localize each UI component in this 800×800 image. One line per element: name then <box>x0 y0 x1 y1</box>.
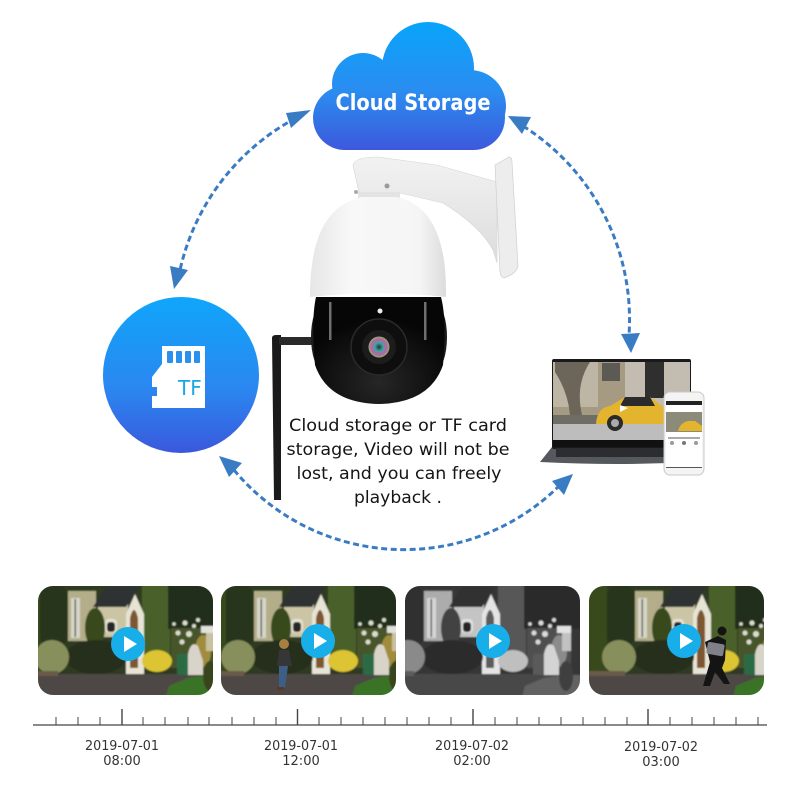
icon: play button <box>301 624 335 658</box>
burglar <box>703 626 730 686</box>
cloud label: Cloud Storage <box>336 91 490 116</box>
description text: playback . <box>354 488 442 508</box>
description text: lost, and you can freely <box>296 464 502 484</box>
laptop and phone <box>540 359 704 475</box>
arrow: cloud to laptop <box>508 116 640 353</box>
timestamp 1: 2019-07-01 <box>85 739 159 754</box>
TF card circle <box>103 297 259 453</box>
description text <box>286 416 510 508</box>
black lens housing <box>311 297 447 404</box>
description text: Cloud storage or TF card <box>289 416 507 436</box>
timeline <box>33 709 767 725</box>
arrow: TF card to laptop <box>219 456 573 550</box>
icon: play button <box>476 624 510 658</box>
antenna <box>272 335 313 500</box>
icon: play button <box>667 624 701 658</box>
woman walking <box>277 639 292 690</box>
video thumbnail 2 <box>221 586 396 695</box>
timestamp 2: 2019-07-01 <box>264 739 338 754</box>
wall bracket <box>353 157 518 278</box>
arrow: cloud to TF card <box>170 110 311 289</box>
timestamp 4: 2019-07-02 <box>624 740 698 755</box>
video thumbnail 1 <box>38 586 213 695</box>
laptop <box>540 359 692 464</box>
description text: storage, Video will not be <box>286 440 510 460</box>
icon: play button <box>111 627 145 661</box>
white dome <box>310 197 446 297</box>
timestamp 3: 2019-07-02 <box>435 739 509 754</box>
phone <box>664 392 704 475</box>
time 2: 12:00 <box>282 754 320 769</box>
PTZ camera <box>272 157 518 500</box>
time 4: 03:00 <box>642 755 680 770</box>
time 3: 02:00 <box>453 754 491 769</box>
video thumbnail 3, night mode <box>405 586 580 695</box>
video thumbnail 4 <box>589 586 764 695</box>
cloud storage icon <box>313 22 506 150</box>
icon: micro SD card <box>152 346 205 408</box>
icon: micro SD card: TF <box>177 376 202 400</box>
time 1: 08:00 <box>103 754 141 769</box>
